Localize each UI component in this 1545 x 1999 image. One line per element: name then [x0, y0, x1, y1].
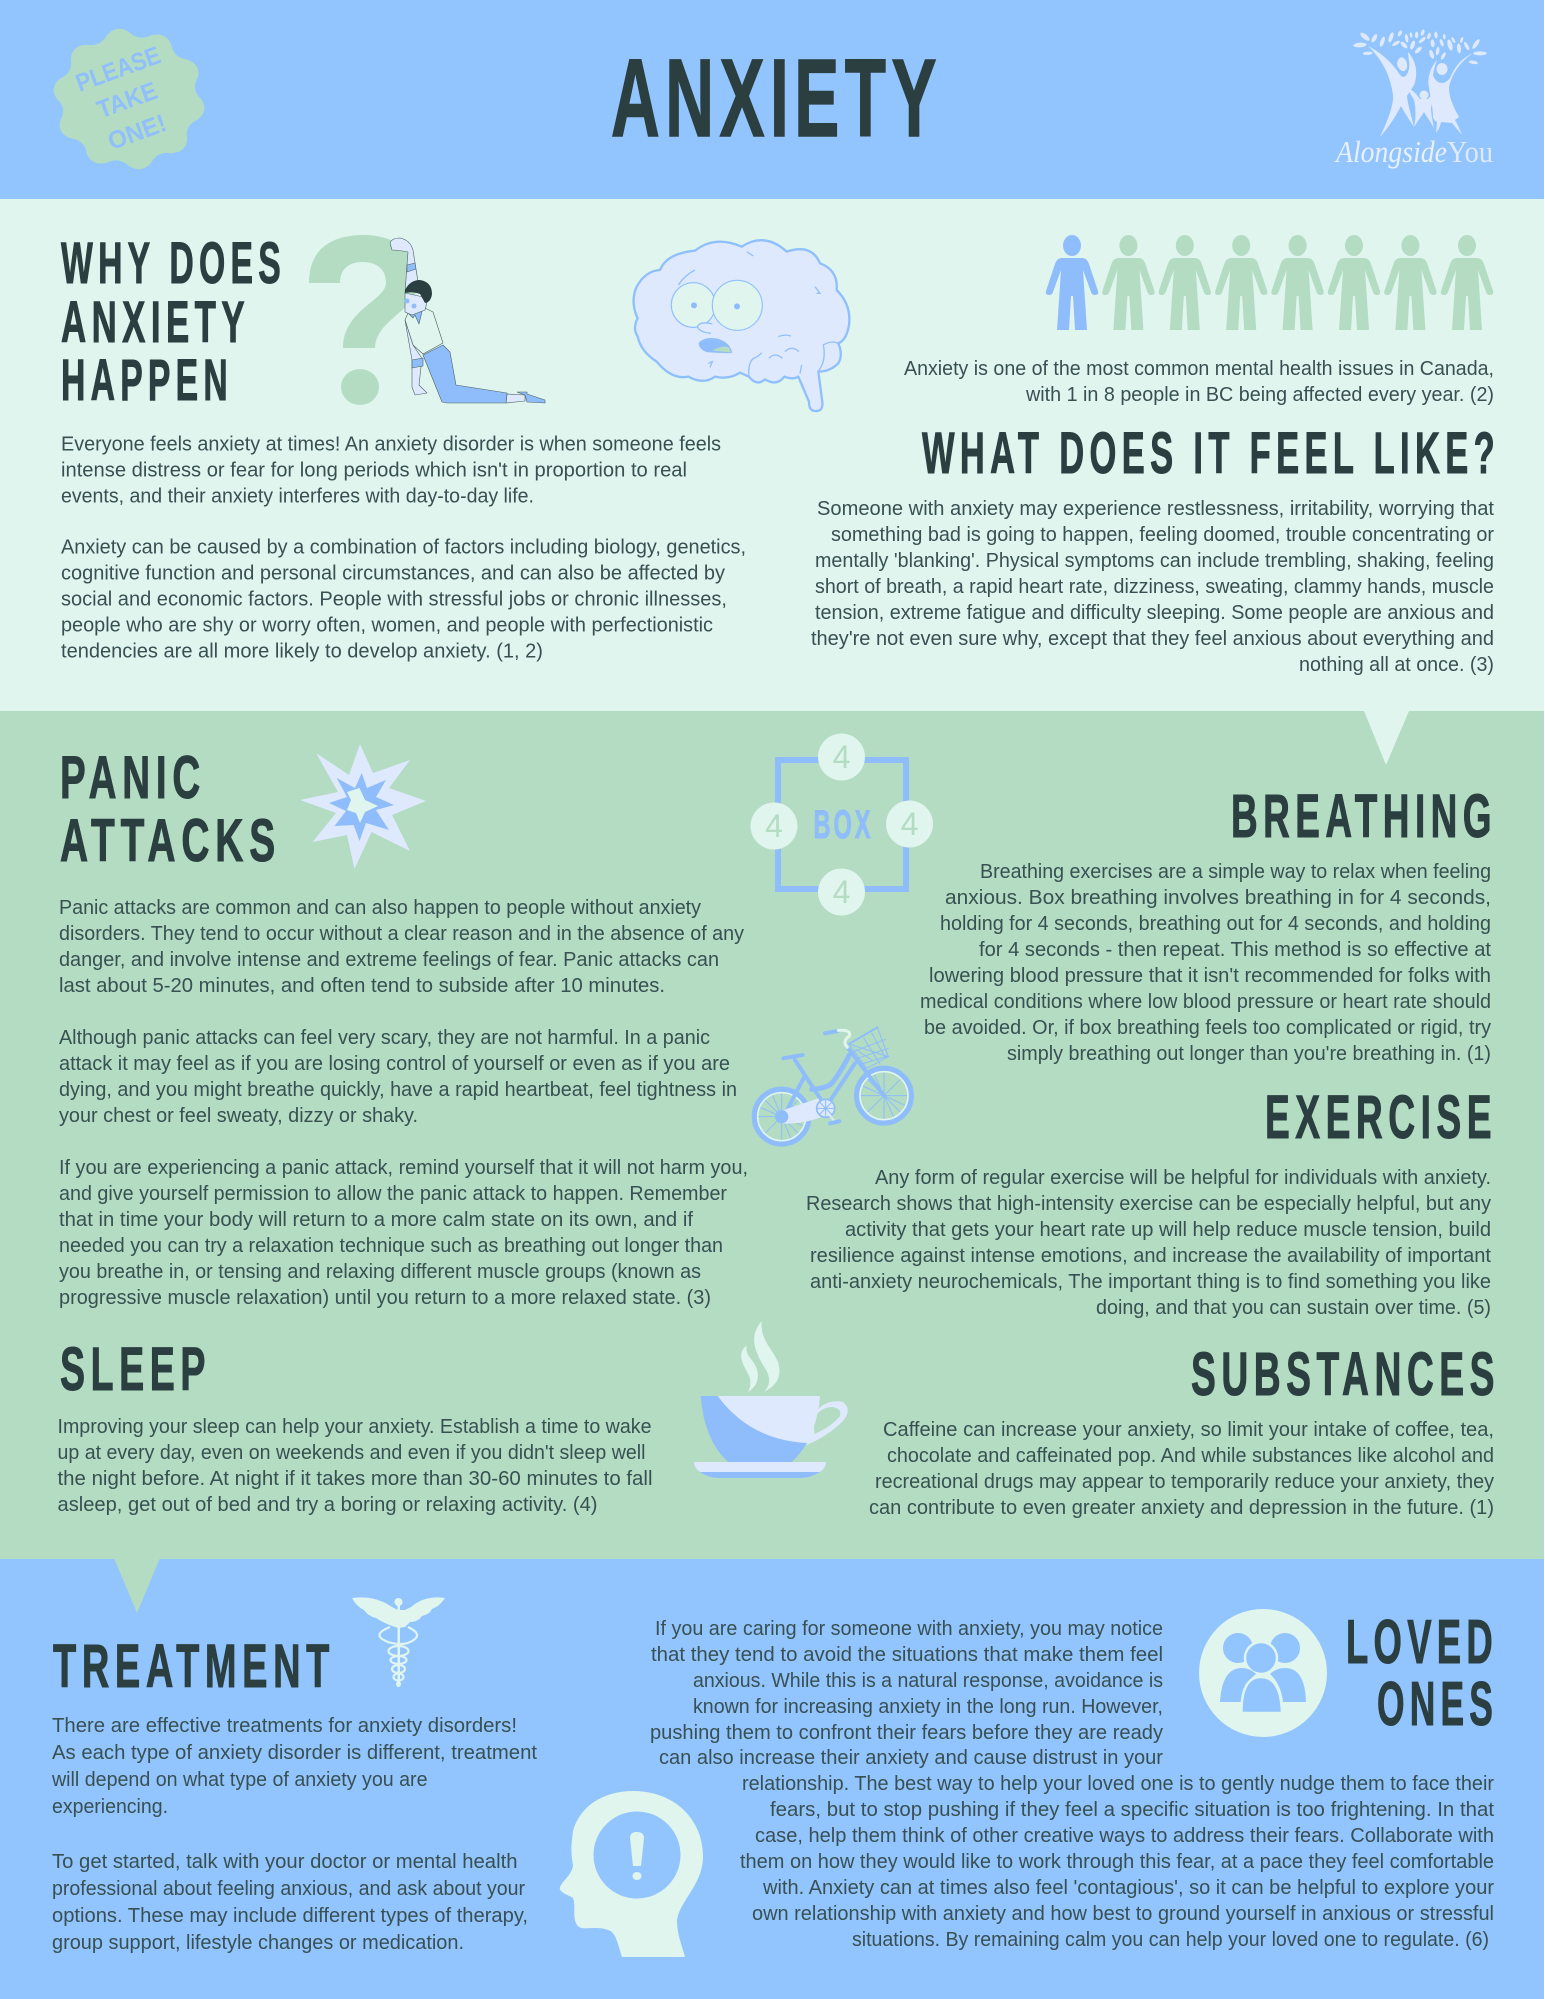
text: what it feels like: they're not even sure why, except that they feel anxious about everything and	[811, 628, 1494, 650]
text: panic attacks: danger, and involve intense and extreme feelings of fear. Panic attacks can	[59, 949, 719, 971]
text: exercise: doing, and that you can sustain over time. (5)	[1096, 1297, 1491, 1319]
text: sleep: asleep, get out of bed and try a boring or relaxing activity. (4)	[58, 1494, 598, 1516]
icon: eight people, one highlighted	[1046, 235, 1493, 330]
collar	[407, 307, 423, 324]
text: breathing: medical conditions where low blood pressure or heart rate should	[920, 991, 1491, 1013]
text: exercise: resilience against intense emotions, and increase the availability of important	[810, 1245, 1491, 1267]
text: breathing: lowering blood pressure that it isn't recommended for folks with	[929, 965, 1491, 987]
sock	[506, 394, 525, 403]
text: treatment: group support, lifestyle changes or medication.	[52, 1932, 464, 1954]
text: breathing: Breathing exercises are a simple way to relax when feeling	[980, 861, 1491, 883]
text: why anxiety happens: intense distress or fear for long periods which isn't in proportion to real	[61, 460, 687, 482]
heading: sleep: SLEEP	[60, 1335, 211, 1403]
text: exercise	[806, 1167, 1491, 1319]
text: substances: Caffeine can increase your anxiety, so limit your intake of coffee, tea,	[883, 1419, 1494, 1441]
text: panic attacks: attack it may feel as if you are losing control of yourself or even as if you are	[59, 1053, 730, 1075]
text: panic attacks: dying, and you might breathe quickly, have a rapid heartbeat, feel tightness in	[59, 1079, 737, 1101]
text: loved ones: situations. By remaining calm you can help your loved one to regulate. (6)	[852, 1929, 1489, 1951]
text: loved ones: with. Anxiety can at times also feel 'contagious', so it can be helpful to explore your	[762, 1877, 1494, 1899]
diagram: box breathing: BOX	[814, 803, 874, 847]
logo: Alongside You	[1334, 29, 1493, 169]
lower arm	[405, 320, 427, 395]
title: ANXIETY	[611, 37, 942, 160]
heading: why does anxiety happen: ANXIETY	[61, 290, 250, 355]
badge: please take one: PLEASE	[72, 41, 164, 98]
text: loved ones: that they tend to avoid the situations that make them feel	[651, 1644, 1163, 1666]
text: loved ones: case, help them think of other creative ways to address their fears. Collaborate with	[755, 1825, 1494, 1847]
text: why anxiety happens: people who are shy or worry often, women, and people with perfectionistic	[61, 614, 713, 636]
heading: why does anxiety happen: WHY DOES	[61, 231, 286, 296]
text: loved ones: If you are caring for someone with anxiety, you may notice	[655, 1618, 1163, 1640]
text: exercise: Research shows that high-intensity exercise can be especially helpful, but any	[806, 1193, 1491, 1215]
raised arm	[390, 238, 418, 293]
icon: question mark with distressed person	[309, 235, 545, 405]
text: substances: can contribute to even greater anxiety and depression in the future. (1)	[869, 1497, 1494, 1519]
diagram: box breathing	[750, 734, 933, 916]
text: panic attacks: needed you can try a relaxation technique such as breathing out longer than	[59, 1235, 723, 1257]
logo: Alongside You: Alongside	[1334, 134, 1447, 169]
icon: group of people in circle	[1199, 1609, 1327, 1737]
text: panic attacks: progressive muscle relaxation) until you return to a more relaxed state. (3)	[59, 1287, 711, 1309]
text: panic attacks: Although panic attacks can feel very scary, they are not harmful. In a panic	[59, 1027, 710, 1049]
text: panic attacks: you breathe in, or tensing and relaxing different muscle groups (known as	[59, 1261, 701, 1283]
heading: why does anxiety happen	[61, 231, 286, 413]
panel: header	[0, 0, 1544, 199]
text: what it feels like: short of breath, a rapid heart rate, dizziness, sweating, clammy hands, muscle	[815, 576, 1494, 598]
text: treatment: As each type of anxiety disorder is different, treatment	[52, 1742, 537, 1764]
text: prevalence statistic: with 1 in 8 people in BC being affected every year. (2)	[1025, 384, 1494, 406]
text: breathing: for 4 seconds - then repeat. This method is so effective at	[979, 939, 1491, 961]
diagram: box breathing: 4	[833, 874, 850, 910]
badge: please take one: ONE!	[104, 109, 170, 156]
text: why anxiety happens: cognitive function and personal circumstances, and can also be affected by	[61, 562, 725, 584]
text: breathing: anxious. Box breathing involves breathing in for 4 seconds,	[945, 887, 1491, 909]
badge: please take one	[54, 29, 204, 169]
face	[405, 293, 428, 315]
shirt	[405, 307, 443, 354]
heading: panic attacks	[60, 744, 281, 874]
text: treatment: experiencing.	[52, 1796, 168, 1818]
text: what it feels like: something bad is going to happen, feeling doomed, trouble concentrating or	[831, 524, 1494, 546]
text: treatment: will depend on what type of anxiety you are	[51, 1769, 428, 1791]
text: what it feels like: Someone with anxiety may experience restlessness, irritability, worrying that	[817, 498, 1494, 520]
text: substances: chocolate and caffeinated pop. And while substances like alcohol and	[887, 1445, 1494, 1467]
heading: why does anxiety happen: HAPPEN	[61, 348, 233, 413]
text: sleep: Improving your sleep can help your anxiety. Establish a time to wake	[58, 1416, 652, 1438]
icon: steaming cup	[694, 1321, 848, 1478]
diagram: box breathing: 4	[765, 808, 783, 844]
diagram: box breathing: 4	[833, 739, 850, 775]
text: treatment: There are effective treatments for anxiety disorders!	[52, 1715, 517, 1737]
text: why anxiety happens: social and economic factors. People with stressful jobs or chronic illnesses,	[61, 588, 727, 610]
text: loved ones: known for increasing anxiety in the long run. However,	[693, 1696, 1163, 1718]
text: what it feels like: tension, extreme fatigue and difficulty sleeping. Some people are anxious and	[815, 602, 1494, 624]
text: what it feels like: nothing all at once. (3)	[1299, 654, 1494, 676]
text: why anxiety happens	[61, 434, 746, 662]
panel: treatment and loved ones	[0, 1558, 1544, 1999]
shoe	[517, 392, 545, 403]
text: loved ones	[650, 1618, 1494, 1951]
panel: why anxiety happens and how it feels	[0, 199, 1544, 711]
text: treatment: To get started, talk with your doctor or mental health	[52, 1851, 518, 1873]
text: breathing: holding for 4 seconds, breathing out for 4 seconds, and holding	[940, 913, 1491, 935]
text: why anxiety happens: Anxiety can be caused by a combination of factors including biology, genetics,	[61, 536, 746, 558]
panel: coping and panic attacks	[0, 711, 1544, 1559]
text: what it feels like	[811, 498, 1494, 676]
text: why anxiety happens: tendencies are all more likely to develop anxiety. (1, 2)	[61, 640, 543, 662]
text: panic attacks: and give yourself permission to allow the panic attack to happen. Remember	[59, 1183, 727, 1205]
text: panic attacks: your chest or feel sweaty, dizzy or shaky.	[59, 1105, 418, 1127]
icon: caduceus	[352, 1597, 445, 1687]
text: loved ones: own relationship with anxiety and how best to ground yourself in anxious or stressful	[752, 1903, 1494, 1925]
text: prevalence statistic: Anxiety is one of the most common mental health issues in Canada,	[904, 358, 1494, 380]
icon: bicycle	[754, 1027, 911, 1144]
text: exercise: activity that gets your heart rate up will help reduce muscle tension, build	[845, 1219, 1491, 1241]
text: exercise: anti-anxiety neurochemicals, The important thing is to find something you like	[810, 1271, 1491, 1293]
text: substances	[869, 1419, 1494, 1519]
text: why anxiety happens: events, and their anxiety interferes with day-to-day life.	[61, 486, 534, 508]
text: what it feels like: mentally 'blanking'. Physical symptoms can include trembling, shaking, feeling	[815, 550, 1494, 572]
text: treatment: professional about feeling anxious, and ask about your	[52, 1878, 525, 1900]
heading: panic attacks: PANIC	[60, 744, 206, 811]
text: panic attacks	[59, 897, 748, 1309]
notch: mint pointer	[1364, 711, 1409, 765]
icon: worried brain	[634, 240, 849, 411]
text: treatment	[51, 1715, 537, 1954]
icon: head with exclamation mark	[560, 1791, 703, 1957]
badge: please take one: TAKE	[93, 77, 161, 124]
text: loved ones: them on how they would like to work through this fear, at a pace they feel comfortable	[740, 1851, 1494, 1873]
text: why anxiety happens: Everyone feels anxiety at times! An anxiety disorder is when someone feels	[61, 434, 721, 456]
text: loved ones: fears, but to stop pushing if they feel a specific situation is too frightening. In that	[770, 1799, 1494, 1821]
text: loved ones: relationship. The best way to help your loved one is to gently nudge them to face their	[742, 1773, 1494, 1795]
text: breathing: be avoided. Or, if box breathing feels too complicated or rigid, try	[924, 1017, 1491, 1039]
diagram: box breathing: 4	[901, 806, 918, 842]
text: exercise: Any form of regular exercise will be helpful for individuals with anxiety.	[875, 1167, 1491, 1189]
text: panic attacks: disorders. They tend to occur without a clear reason and in the absence of any	[59, 923, 744, 945]
heading: treatment: TREATMENT	[53, 1632, 335, 1700]
pants	[423, 345, 507, 403]
text: loved ones: anxious. While this is a natural response, avoidance is	[693, 1670, 1163, 1692]
text: panic attacks: If you are experiencing a panic attack, remind yourself that it will not harm you,	[59, 1157, 748, 1179]
text: substances: recreational drugs may appear to temporarily reduce your anxiety, they	[875, 1471, 1494, 1493]
text: prevalence statistic	[904, 358, 1494, 406]
icon: starburst	[300, 744, 426, 869]
text: panic attacks: Panic attacks are common and can also happen to people without anxiety	[59, 897, 701, 919]
heading: loved ones	[1346, 1608, 1498, 1739]
text: sleep	[58, 1416, 652, 1516]
heading: panic attacks: ATTACKS	[60, 807, 281, 874]
text: treatment: options. These may include different types of therapy,	[52, 1905, 528, 1927]
text: sleep: up at every day, even on weekends and even if you didn't sleep well	[58, 1442, 646, 1464]
text: panic attacks: last about 5-20 minutes, and often tend to subside after 10 minutes.	[59, 975, 665, 997]
text: panic attacks: that in time your body will return to a more calm state on its own, and if	[59, 1209, 693, 1231]
text: breathing: simply breathing out longer than you're breathing in. (1)	[1007, 1043, 1491, 1065]
logo: Alongside You: You	[1447, 134, 1493, 169]
text: loved ones: can also increase their anxiety and cause distrust in your	[659, 1747, 1163, 1769]
text: loved ones: pushing them to confront their fears before they are ready	[650, 1722, 1163, 1744]
text: sleep: the night before. At night if it takes more than 30-60 minutes to fall	[58, 1468, 652, 1490]
text: breathing	[920, 861, 1491, 1065]
notch: green pointer	[114, 1558, 160, 1613]
